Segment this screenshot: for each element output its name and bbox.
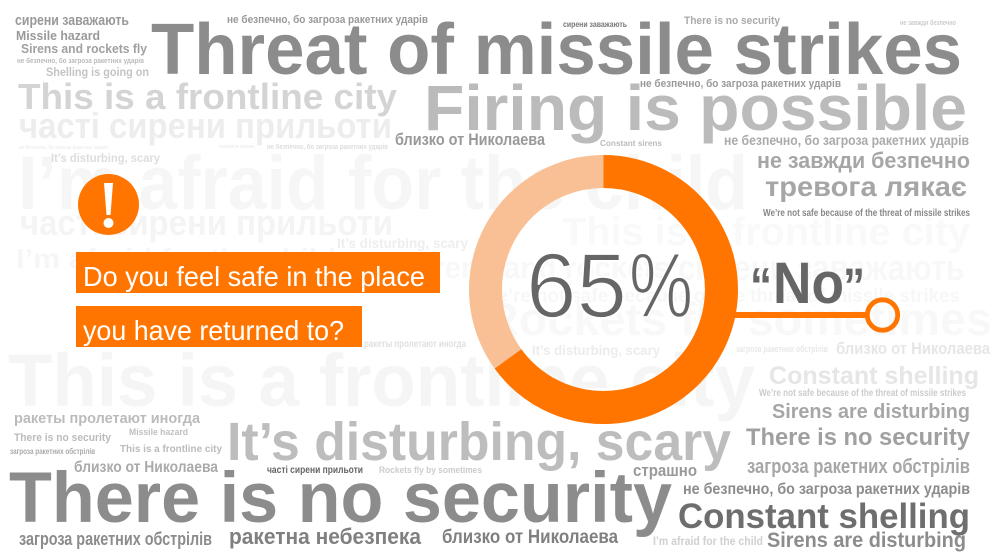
- question banner, line 2: you have returned to?: [83, 315, 344, 346]
- phrase: disturbing center: It’s disturbing, scary: [337, 235, 468, 251]
- phrase: no security small: There is no security: [14, 432, 112, 444]
- phrase: missile danger: ракетна небезпека: [229, 524, 422, 549]
- phrase: sirens and rockets fly: Sirens and rockets fly: [21, 41, 148, 56]
- headline phrase: disturbing scary: It’s disturbing, scary: [227, 412, 731, 472]
- phrase: frequent sirens: часті сирени прильоти: [19, 105, 392, 146]
- answer label: No: [750, 251, 865, 316]
- tiny phrase: not safe left: не безпечно, бо загроза ракетних ударів: [19, 144, 108, 151]
- phrase: afraid for the child small: I’m afraid for the child: [653, 534, 763, 548]
- phrase: close to Mykolaiv left: близко от Николаева: [74, 459, 218, 476]
- phrase: not safe tiny: не безпечно, бо загроза ракетних ударів: [17, 57, 145, 65]
- phrase: threat of shelling bottom: загроза ракетних обстрілів: [19, 529, 212, 549]
- faint phrase: frequent sirens: часті сирени прильоти: [20, 202, 393, 243]
- phrase: constant sirens: Constant sirens: [600, 139, 663, 148]
- phrase: close to Mykolaiv: близко от Николаева: [395, 130, 545, 149]
- phrase: rockets fly over: ракеты пролетают иногда: [14, 410, 201, 427]
- phrase: frontline city: This is a frontline city: [18, 76, 397, 117]
- phrase: shelling is going on: Shelling is going on: [46, 65, 149, 79]
- phrase: rockets fly by: Rockets fly by sometimes: [379, 465, 482, 475]
- headline phrase: firing is possible: Firing is possible: [424, 72, 967, 144]
- phrase: sirens disturb: сирени заважають: [15, 12, 129, 29]
- faint phrase: not safe: We’re not safe because of the threat of missile strikes: [480, 286, 960, 307]
- phrase: not safe bottom right: не безпечно, бо загроза ракетних ударів: [683, 481, 970, 498]
- tiny phrase: alarm: тревога лякає: [218, 144, 255, 150]
- donut chart: 65 percent: 65: [526, 235, 627, 337]
- phrase: disturbing inside ring: It’s disturbing, scary: [532, 342, 660, 358]
- headline phrase: threat of missile strikes: Threat of missile strikes: [151, 10, 962, 90]
- phrase: close to Mykolaiv bottom: близко от Николаева: [442, 527, 618, 548]
- answer label: No: No: [773, 251, 844, 316]
- phrase: missile hazard: Missile hazard: [16, 28, 100, 43]
- answer label: No: “: [750, 258, 772, 314]
- phrase: no security top: There is no security: [684, 15, 781, 27]
- phrase: rockets fly over faint: ракеты пролетают иногда: [364, 339, 466, 350]
- phrase: constant shelling dark: Constant shelling: [678, 497, 970, 536]
- phrase: scary: страшно: [633, 461, 697, 480]
- donut chart: 65 percent: [486, 172, 722, 408]
- question banner, line 1: Do you feel safe in the place: [83, 261, 425, 292]
- phrase: constant shelling faint: Constant shelling: [769, 362, 979, 390]
- faint phrase: I'm afraid small: I’m afraid for the child: [16, 243, 336, 274]
- phrase: frontline city small: This is a frontline city: [120, 443, 222, 455]
- answer label: No: ”: [843, 258, 865, 314]
- faint phrase: frontline city right: This is a frontline city: [562, 211, 970, 254]
- phrase: missile hazard small: Missile hazard: [129, 427, 188, 437]
- phrase: sirens disturb tiny: сирени заважають: [563, 20, 627, 29]
- phrase: no security right: There is no security: [746, 424, 971, 451]
- phrase: not always safe tiny: не завжди безпечно: [900, 19, 956, 27]
- phrase: not safe between headlines: не безпечно, бо загроза ракетних ударів: [640, 78, 841, 90]
- phrase: threat of shelling tiny: загроза ракетних обстрілів: [10, 447, 95, 456]
- tiny phrase: not safe middle: не безпечно, бо загроза ракетних ударів: [267, 143, 389, 151]
- faint phrase: rockets fly sometimes: Rockets fly sometimes: [485, 293, 992, 345]
- callout line with ring marker: [735, 300, 898, 330]
- phrase: frequent sirens small: часті сирени прильоти: [267, 465, 363, 476]
- phrase: not always safe: не завжди безпечно: [757, 148, 970, 173]
- phrase: threat of shelling faint: загроза ракетних обстрілів: [736, 344, 828, 354]
- faint phrase: frontline city large: This is a frontline city: [8, 339, 755, 422]
- faint phrase: I'm afraid for the child: I’m afraid for the child: [18, 141, 748, 226]
- faint phrase: sirens and rockets: Sirens and rockets: [405, 250, 670, 285]
- phrase: not safe top: не безпечно, бо загроза ракетних ударів: [227, 14, 428, 26]
- phrase: sirens are disturbing: Sirens are disturbing: [772, 401, 970, 423]
- phrase: alarm frightens: тревога лякає: [765, 171, 967, 202]
- donut chart: 65 percent: %: [629, 235, 693, 337]
- headline phrase: there is no security: There is no security: [9, 459, 673, 538]
- phrase: disturbing left: It’s disturbing, scary: [51, 151, 160, 165]
- icon: exclamation mark in orange circle: [78, 174, 139, 235]
- phrase: sirens are disturbing dark: Sirens are disturbing: [767, 529, 966, 552]
